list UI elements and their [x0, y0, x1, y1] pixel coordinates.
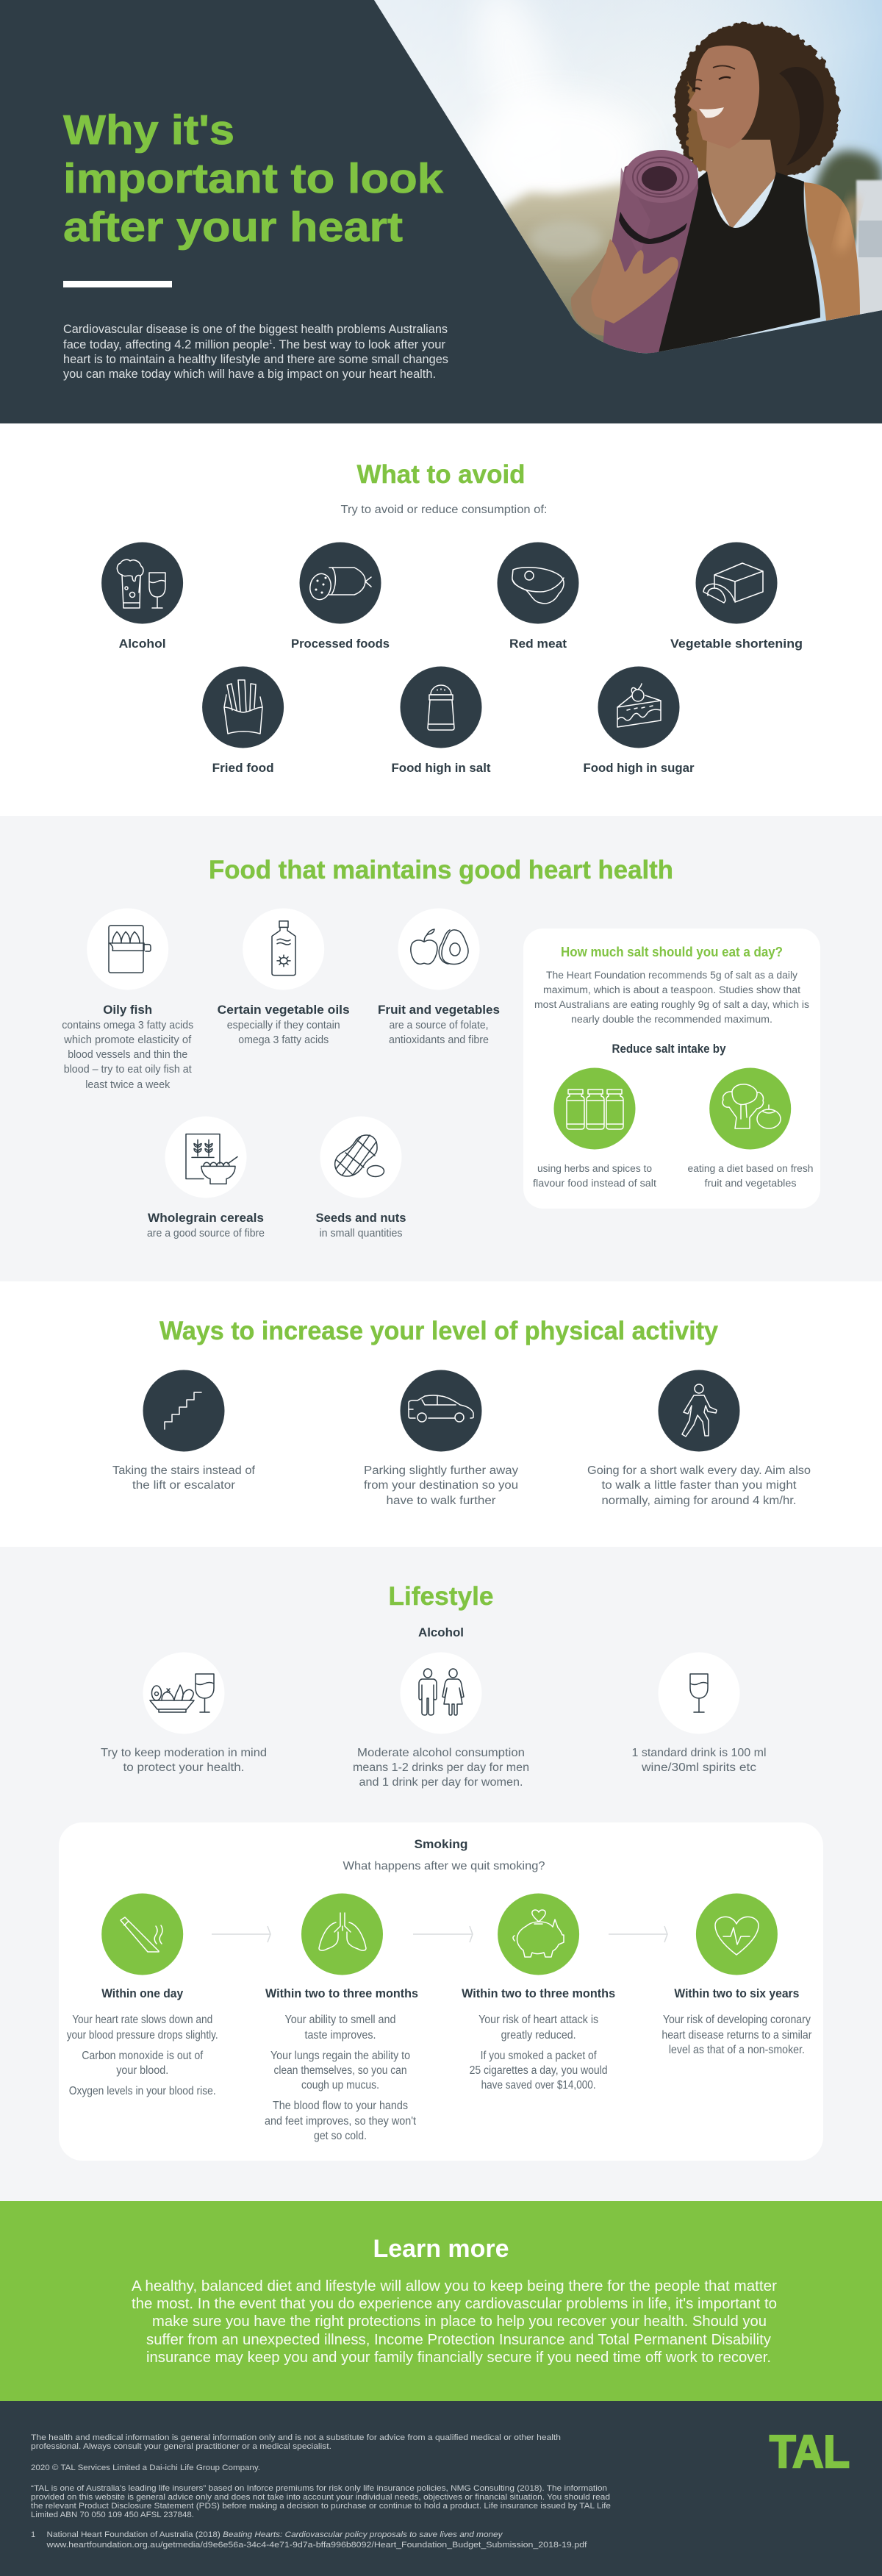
item: car: from your destination so you	[364, 1479, 518, 1492]
panel: hero	[0, 0, 882, 423]
step: within one day: Carbon monoxide is out of	[82, 2050, 204, 2062]
step: within one day: Your heart rate slows down and	[72, 2014, 212, 2026]
item: oily fish: blood – try to eat oily fish at	[64, 1064, 192, 1076]
step: within two to three months (piggy bank)	[462, 1894, 615, 2092]
item: fruit and vegetables: antioxidants and fibre	[389, 1034, 489, 1046]
intro text: 1	[269, 339, 273, 346]
item: stairs: the lift or escalator	[132, 1479, 235, 1492]
item: moderation: Try to keep moderation in mind	[101, 1747, 267, 1759]
step: within two to three months (lungs): cough up mucus.	[301, 2079, 379, 2092]
item: processed foods	[291, 543, 390, 651]
body text: insurance may keep you and your family financially secure if you need time off work to recover.	[146, 2350, 771, 2366]
step: within two to three months (lungs): The blood flow to your hands	[273, 2100, 408, 2112]
card: smoking	[59, 1822, 823, 2161]
item: walking: to walk a little faster than you might	[601, 1479, 797, 1492]
item: car	[364, 1370, 518, 1507]
step: within two to three months (lungs): and feet improves, so they won't	[265, 2115, 417, 2128]
step: within two to three months (lungs): get so cold.	[314, 2130, 367, 2142]
disclaimer text: the relevant Product Disclosure Statement (PDS) before making a decision to purchase or continue to hold a product. Life insurance issued by TAL Life	[31, 2502, 611, 2511]
intro text: Cardiovascular disease is one of the biggest health problems Australians	[63, 323, 448, 336]
step: within two to three months (lungs): Your lungs regain the ability to	[270, 2050, 410, 2062]
item: standard drink	[632, 1653, 766, 1774]
item: oily fish: Oily fish	[103, 1003, 152, 1017]
title: after your heart	[63, 204, 403, 251]
step: within two to six years: Your risk of developing coronary	[663, 2014, 811, 2026]
card: how much salt: fruit and vegetables	[704, 1178, 797, 1189]
body text: suffer from an unexpected illness, Income Protection Insurance and Total Permanent Disability	[146, 2332, 771, 2348]
item: moderation	[101, 1653, 267, 1774]
item: wholegrain cereals: are a good source of fibre	[147, 1228, 265, 1239]
item: walking: normally, aiming for around 4 km/hr.	[601, 1495, 797, 1507]
item: wholegrain cereals: Wholegrain cereals	[148, 1211, 264, 1225]
item: standard drink: wine/30ml spirits etc	[641, 1761, 756, 1774]
subheading: alcohol: Alcohol	[418, 1625, 464, 1639]
item: moderation: to protect your health.	[123, 1761, 244, 1774]
disclaimer text: National Heart Foundation of Australia (2018) Beating Hearts: Cardiovascular policy proposals to save lives and money	[47, 2530, 503, 2539]
intro text: heart is to maintain a healthy lifestyle and there are some small changes	[63, 353, 448, 366]
arrow	[212, 1926, 270, 1942]
card: how much salt: Reduce salt intake by	[612, 1042, 726, 1056]
panel: lifestyle	[0, 1547, 882, 2201]
step: within two to three months (piggy bank): have saved over $14,000.	[481, 2079, 596, 2092]
item: stairs: Taking the stairs instead of	[112, 1464, 256, 1477]
item: fruit and vegetables	[378, 909, 500, 1046]
item: food high in sugar: Food high in sugar	[584, 761, 695, 775]
title: important to look	[63, 155, 443, 202]
item: seeds and nuts: Seeds and nuts	[316, 1211, 406, 1225]
card: how much salt	[523, 929, 820, 1209]
icon: spice jars	[554, 1067, 635, 1150]
item: walking	[587, 1370, 811, 1507]
item: certain vegetable oils	[218, 909, 350, 1046]
disclaimer text	[31, 2433, 611, 2550]
intro text: you can make today which will have a big impact on your heart health.	[63, 368, 436, 381]
item: certain vegetable oils: Certain vegetable oils	[218, 1003, 350, 1017]
card: how much salt: using herbs and spices to	[537, 1163, 652, 1174]
step: within two to three months (lungs): taste improves.	[304, 2029, 376, 2042]
item: oily fish: contains omega 3 fatty acids	[62, 1020, 193, 1031]
body text: make sure you have the right protections in place to help you recover your health. Should you	[152, 2314, 767, 2330]
item: red meat	[497, 543, 579, 651]
icon: broccoli and tomato	[709, 1067, 791, 1150]
step: within two to three months (piggy bank): 25 cigarettes a day, you would	[470, 2064, 608, 2077]
item: certain vegetable oils: especially if they contain	[227, 1020, 340, 1031]
item: men and women: means 1-2 drinks per day for men	[353, 1761, 529, 1774]
hero photo: woman holding yoga mat	[368, 0, 882, 360]
item: vegetable shortening: Vegetable shortening	[670, 637, 803, 651]
step: within two to three months (piggy bank): If you smoked a packet of	[481, 2050, 597, 2062]
item: oily fish: blood vessels and thin the	[68, 1049, 187, 1061]
panel: what to avoid	[101, 460, 803, 775]
item: seeds and nuts	[316, 1116, 406, 1239]
item: standard drink: 1 standard drink is 100 ml	[632, 1747, 766, 1759]
item: men and women	[353, 1653, 529, 1789]
item: seeds and nuts: in small quantities	[319, 1228, 403, 1239]
step: within two to six years: heart disease returns to a similar	[662, 2029, 811, 2042]
step: within two to three months (lungs): clean themselves, so you can	[273, 2064, 407, 2077]
item: certain vegetable oils: omega 3 fatty acids	[238, 1034, 329, 1046]
item: alcohol: Alcohol	[119, 637, 166, 651]
step: within two to three months (piggy bank): greatly reduced.	[501, 2029, 576, 2042]
card: how much salt: The Heart Foundation recommends 5g of salt as a daily	[546, 970, 797, 981]
logo: TAL: TAL	[770, 2427, 850, 2477]
title: Why it's	[63, 107, 234, 154]
heading: What to avoid	[357, 460, 525, 489]
item: food high in salt: Food high in salt	[391, 761, 491, 775]
panel: learn more	[0, 2201, 882, 2401]
heading: Learn more	[373, 2235, 509, 2263]
item: wholegrain cereals	[147, 1116, 265, 1239]
disclaimer text: professional. Always consult your general practitioner or a medical specialist.	[31, 2442, 331, 2451]
intro line: Try to avoid or reduce consumption of:	[341, 504, 547, 516]
intro text	[63, 323, 448, 381]
item: alcohol	[101, 543, 183, 651]
step: within two to three months (lungs): Within two to three months	[265, 1986, 418, 2000]
item: processed foods: Processed foods	[291, 637, 390, 651]
item: fruit and vegetables: Fruit and vegetables	[378, 1003, 500, 1017]
intro text: face today, affecting 4.2 million people	[63, 338, 268, 351]
card: smoking: What happens after we quit smoking?	[343, 1860, 545, 1872]
panel: food that maintains good heart health	[0, 816, 882, 1281]
step: within one day: your blood.	[116, 2064, 168, 2077]
disclaimer text: “TAL is one of Australia's leading life insurers” based on Inforce premiums for risk only life insurance policies, NMG Consulting (2018). The information	[31, 2484, 607, 2493]
item: fried food: Fried food	[212, 761, 274, 775]
disclaimer text: 1	[31, 2530, 35, 2539]
arrow	[413, 1926, 473, 1942]
step: within two to three months (lungs)	[265, 1894, 418, 2142]
disclaimer text: www.heartfoundation.org.au/getmedia/d9e6e56a-34c4-4e71-9d7a-bffa996b8092/Heart_Foundation_Budget_Submission_2018-19.pdf	[46, 2541, 587, 2550]
arrow	[609, 1926, 667, 1942]
card: how much salt: How much salt should you eat a day?	[561, 945, 783, 959]
card: how much salt: nearly double the recommended maximum.	[571, 1014, 772, 1025]
item: men and women: and 1 drink per day for women.	[359, 1776, 523, 1789]
item: men and women: Moderate alcohol consumption	[357, 1747, 525, 1759]
heading: Ways to increase your level of physical activity	[159, 1317, 719, 1345]
body text: the most. In the event that you do experience any cardiovascular problems in life, it's important to	[132, 2296, 777, 2312]
disclaimer text: Limited ABN 70 050 109 450 AFSL 237848.	[31, 2511, 194, 2519]
step: within two to six years: level as that of a non-smoker.	[669, 2044, 805, 2056]
step: within one day: your blood pressure drops slightly.	[67, 2029, 218, 2042]
disclaimer text: provided on this website is general advice only and does not take into account your individual needs, objectives or financial situation. You should read	[31, 2493, 610, 2502]
item: food high in sugar	[584, 666, 695, 775]
card: how much salt: most Australians are eating roughly 9g of salt a day, which is	[534, 999, 809, 1010]
item: stairs	[112, 1370, 256, 1492]
item: car: Parking slightly further away	[364, 1464, 518, 1477]
item: fruit and vegetables: are a source of folate,	[390, 1020, 488, 1031]
disclaimer text: The health and medical information is general information only and is not a substitute for advice from a qualified medical or other health	[31, 2433, 561, 2442]
item: food high in salt	[391, 666, 491, 775]
item: oily fish: which promote elasticity of	[63, 1034, 192, 1046]
step: within two to six years	[662, 1894, 811, 2056]
body text	[132, 2278, 777, 2366]
step: within two to three months (piggy bank): Within two to three months	[462, 1986, 615, 2000]
item: red meat: Red meat	[509, 637, 567, 651]
disclaimer text: 2020 © TAL Services Limited a Dai-ichi Life Group Company.	[31, 2464, 260, 2472]
step: within one day: Within one day	[101, 1986, 184, 2000]
item: oily fish: least twice a week	[85, 1079, 171, 1091]
step: within one day	[67, 1894, 218, 2097]
step: within one day: Oxygen levels in your blood rise.	[69, 2085, 216, 2097]
card: how much salt: maximum, which is about a teaspoon. Studies show that	[543, 984, 800, 995]
card: how much salt: flavour food instead of salt	[533, 1178, 656, 1189]
heading: Lifestyle	[388, 1582, 494, 1611]
title	[63, 107, 443, 251]
item: fried food	[202, 666, 284, 775]
card: how much salt: eating a diet based on fresh	[688, 1163, 813, 1174]
panel: footer	[0, 2401, 882, 2576]
card: smoking: Smoking	[415, 1837, 467, 1851]
item: car: have to walk further	[387, 1495, 495, 1507]
step: within two to three months (piggy bank): Your risk of heart attack is	[478, 2014, 598, 2026]
step: within two to six years: Within two to six years	[674, 1986, 799, 2000]
intro text: . The best way to look after your	[273, 338, 446, 351]
body text: A healthy, balanced diet and lifestyle will allow you to keep being there for the people that matter	[132, 2278, 777, 2294]
item: vegetable shortening	[670, 543, 803, 651]
item: walking: Going for a short walk every day. Aim also	[587, 1464, 811, 1477]
heading: Food that maintains good heart health	[209, 856, 673, 884]
item: oily fish	[62, 909, 193, 1091]
panel: physical activity	[112, 1317, 811, 1507]
title underline	[63, 281, 172, 287]
step: within two to three months (lungs): Your ability to smell and	[285, 2014, 395, 2026]
